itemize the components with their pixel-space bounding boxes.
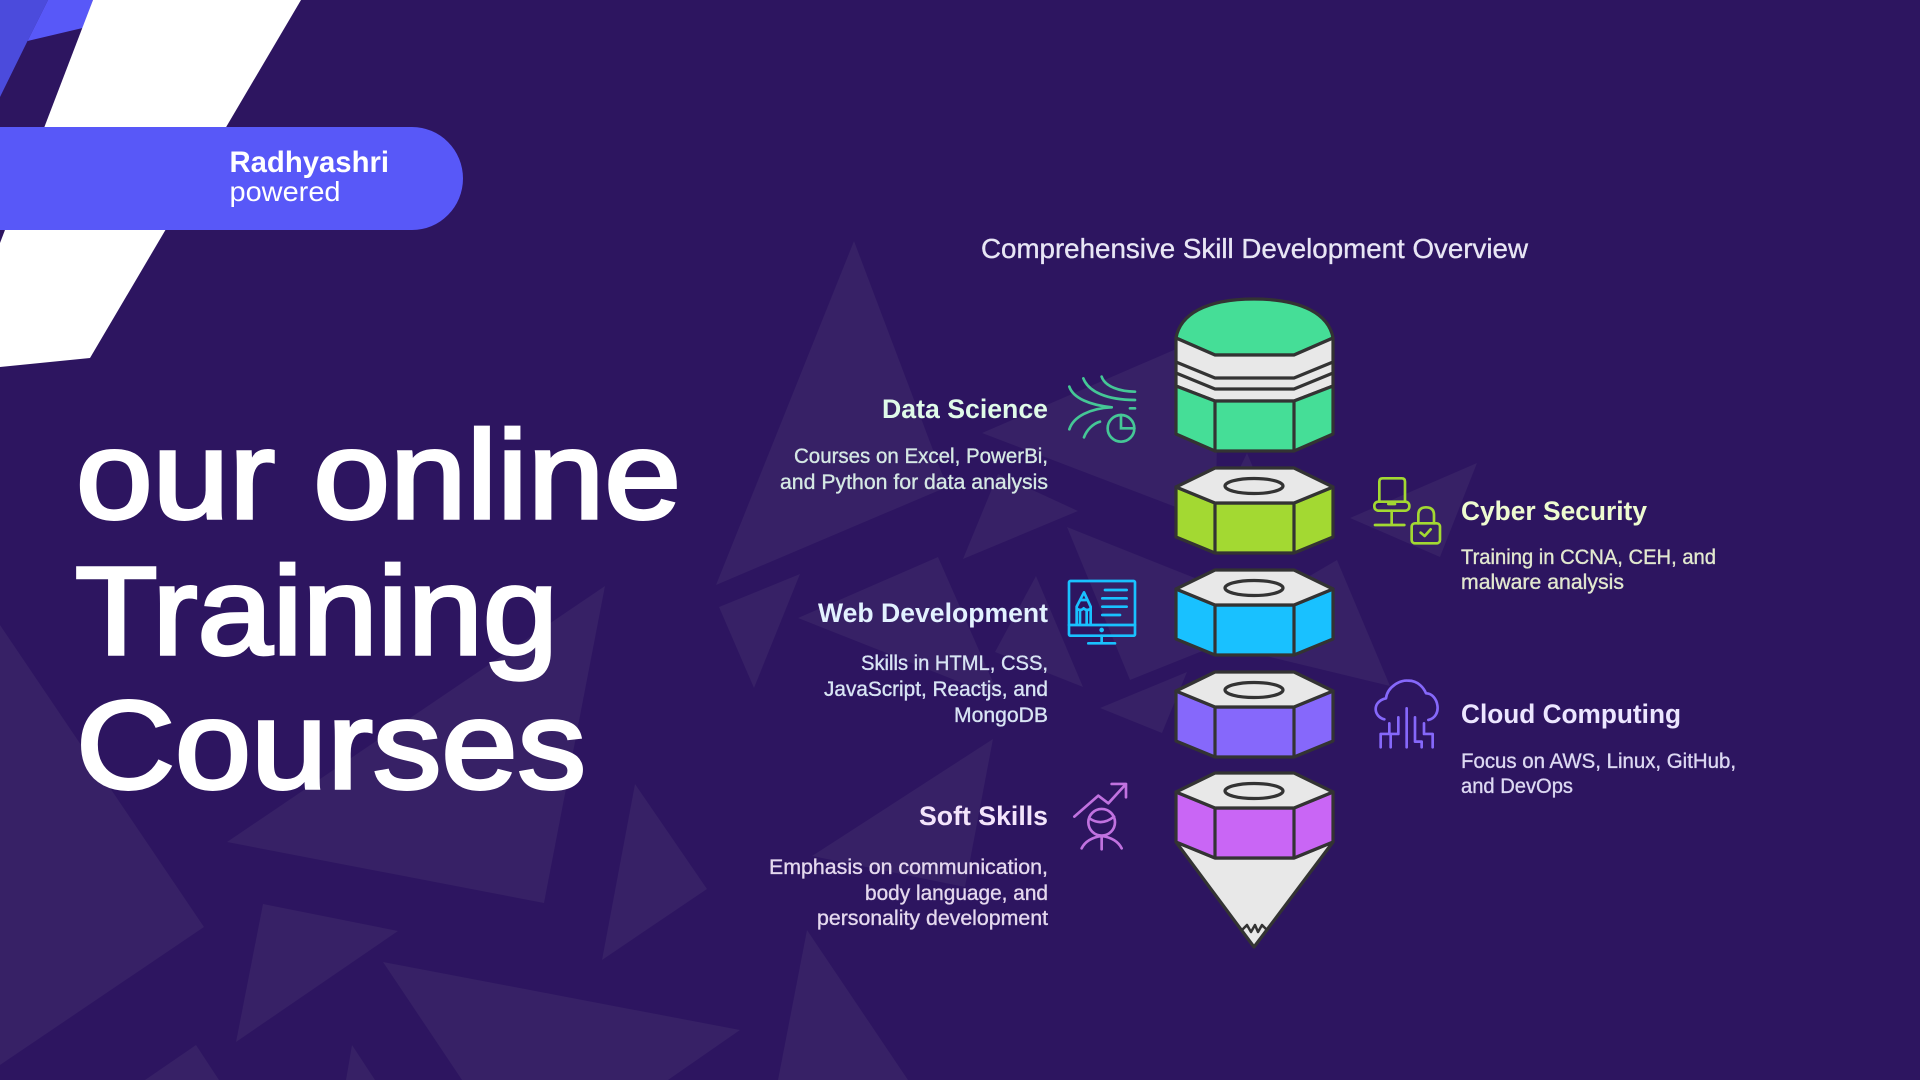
description: soft skills: body language, and	[865, 881, 1048, 905]
brand name: Radhyashri	[230, 146, 389, 179]
heading: cyber security: Cyber Security	[1461, 496, 1647, 526]
panel: cyber security text	[1461, 496, 1716, 594]
icon: cloud computing	[1376, 681, 1438, 747]
heading: soft skills: Soft Skills	[919, 801, 1048, 831]
description: web development	[824, 651, 1048, 727]
description: data science: Courses on Excel, PowerBi,	[794, 444, 1048, 468]
icon: web development	[1069, 581, 1135, 643]
pencil segment: blue	[1176, 570, 1333, 655]
description: data science	[780, 444, 1048, 494]
panel: data science text	[780, 394, 1048, 494]
background triangle pattern	[0, 241, 1477, 1080]
description: cyber security: Training in CCNA, CEH, and	[1461, 545, 1716, 569]
brand tagline: powered	[230, 176, 340, 207]
heading: cloud computing: Cloud Computing	[1461, 699, 1681, 729]
description: cloud computing	[1461, 749, 1736, 798]
heading: web development: Web Development	[818, 598, 1048, 628]
panel: cloud computing text	[1461, 699, 1736, 798]
description: data science: and Python for data analysis	[780, 470, 1048, 494]
diagram title: Comprehensive Skill Development Overview	[981, 233, 1529, 264]
corner shape: white slash	[0, 0, 301, 367]
description: cyber security	[1461, 545, 1716, 594]
icon: data science	[1069, 377, 1135, 442]
description: cyber security: malware analysis	[1461, 570, 1624, 594]
pencil lead line	[1242, 925, 1267, 932]
panel: web development text	[818, 598, 1048, 727]
description: cloud computing: Focus on AWS, Linux, GitHub,	[1461, 749, 1736, 773]
icon: cyber security	[1374, 478, 1440, 543]
description: web development: JavaScript, Reactjs, and	[824, 677, 1048, 701]
description: soft skills: personality development	[817, 906, 1048, 930]
main title: Training	[75, 542, 558, 681]
description: soft skills: Emphasis on communication,	[769, 855, 1048, 879]
pencil segment: purple	[1176, 672, 1333, 757]
pencil tip	[1176, 842, 1333, 947]
icon: soft skills	[1074, 784, 1126, 849]
description: web development: Skills in HTML, CSS,	[861, 651, 1048, 675]
description: web development: MongoDB	[954, 703, 1048, 727]
panel: soft skills text	[769, 801, 1048, 930]
heading: data science: Data Science	[882, 394, 1048, 424]
pencil diagram	[1176, 299, 1333, 947]
brand pill	[0, 127, 463, 230]
description: soft skills	[769, 855, 1048, 930]
pencil segment: lime	[1176, 468, 1333, 553]
main title: our online	[76, 406, 681, 545]
corner shape: light blue	[28, 0, 93, 41]
corner shape: dark blue	[0, 0, 48, 97]
pencil eraser: green	[1176, 299, 1333, 451]
pencil segment: magenta	[1176, 773, 1333, 858]
main title: Courses	[76, 676, 586, 815]
description: cloud computing: and DevOps	[1461, 774, 1573, 798]
main title	[75, 406, 681, 815]
